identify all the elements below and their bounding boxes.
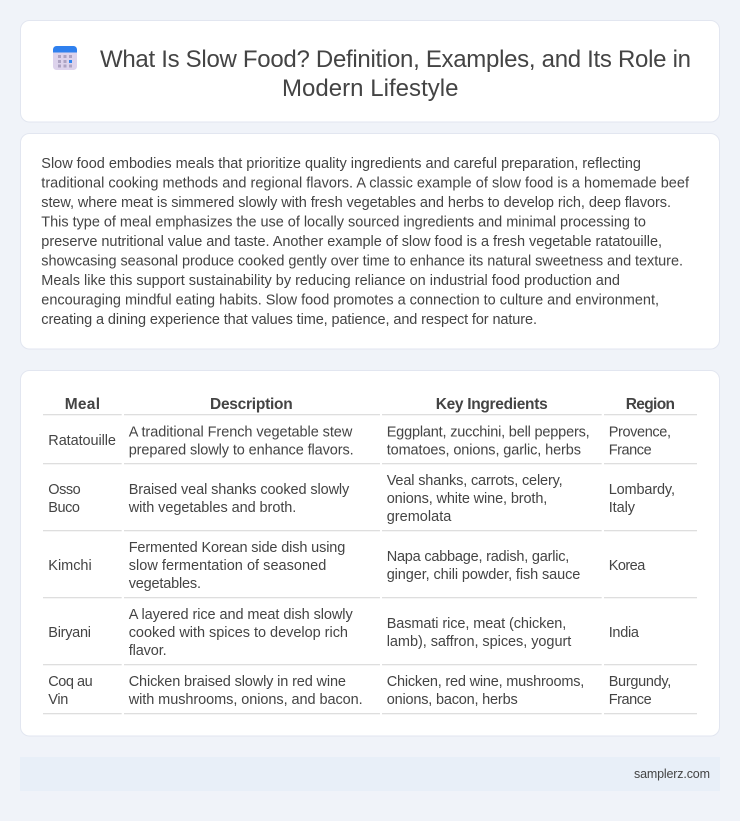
table row: Kimchi: slow fermentation of seasoned [129, 558, 326, 574]
table row: Kimchi: Napa cabbage, radish, garlic, [387, 549, 569, 565]
table row: Kimchi: Kimchi [48, 558, 92, 574]
table row: Coq au Vin: Coq au [48, 674, 93, 690]
table row: Osso Buco: Braised veal shanks cooked slowly [129, 482, 350, 498]
table row: Osso Buco: with vegetables and broth. [128, 500, 296, 516]
table row: Coq au Vin: onions, bacon, herbs [387, 692, 518, 708]
table row: Osso Buco: Veal shanks, carrots, celery, [387, 473, 563, 489]
table row: Biryani: India [609, 625, 640, 641]
table row: Coq au Vin: with mushrooms, onions, and bacon. [128, 692, 363, 708]
table row: Biryani: Basmati rice, meat (chicken, [387, 616, 566, 632]
footer bar: samplerz.com [634, 767, 710, 781]
table row: Osso Buco: onions, white wine, broth, [387, 491, 547, 507]
text block: slow food definition: traditional cooking methods and regional flavors. A classic example of slow food is a homemade beef [41, 176, 690, 192]
table row: Ratatouille: tomatoes, onions, garlic, herbs [387, 442, 581, 458]
table header row: Region [626, 396, 675, 413]
table header row: Description [210, 396, 293, 413]
panel: introduction paragraph [20, 134, 720, 349]
table row: Coq au Vin [48, 674, 671, 708]
table header row: Meal [65, 396, 100, 413]
table row: Kimchi: ginger, chili powder, fish sauce [387, 567, 580, 583]
table row: Kimchi: vegetables. [129, 576, 201, 592]
table header row [65, 396, 675, 413]
table row: Ratatouille: Ratatouille [48, 433, 116, 449]
table row: Ratatouille: Provence, [609, 424, 671, 440]
table row: Osso Buco: Osso [48, 482, 81, 498]
table row: Biryani: Biryani [48, 625, 91, 641]
table row: Osso Buco: Lombardy, [609, 482, 675, 498]
table row: Kimchi [48, 540, 646, 592]
text block: slow food definition: Slow food embodies meals that prioritize quality ingredients and careful preparation, reflecting [41, 156, 641, 172]
table row: Ratatouille: France [609, 442, 652, 458]
table row: Osso Buco: Buco [48, 500, 80, 516]
table row: Osso Buco: Italy [609, 500, 636, 516]
table row: Biryani: cooked with spices to develop rich [129, 625, 348, 641]
table row: Kimchi: Korea [609, 558, 646, 574]
panel: header [20, 20, 720, 122]
table row: Ratatouille: prepared slowly to enhance flavors. [129, 442, 354, 458]
table row: Coq au Vin: Chicken braised slowly in red wine [129, 674, 346, 690]
text block: slow food definition: showcasing seasonal produce cooked gently over time to enhance its natural sweetness and texture. [41, 254, 683, 270]
table row: Coq au Vin: Chicken, red wine, mushrooms, [387, 674, 584, 690]
table row: Biryani: lamb), saffron, spices, yogurt [387, 634, 571, 650]
footer bar [20, 757, 720, 791]
title: Modern Lifestyle [282, 75, 458, 102]
table row: Coq au Vin: France [609, 692, 652, 708]
table header row: Key Ingredients [436, 396, 548, 413]
icon: calendar [53, 46, 77, 70]
text block: slow food definition [41, 156, 690, 328]
table row: Osso Buco: gremolata [387, 509, 452, 525]
title: What Is Slow Food? Definition, Examples, and Its Role in [100, 46, 691, 73]
table row: Ratatouille: A traditional French vegetable stew [129, 424, 353, 440]
table row: Coq au Vin: Burgundy, [609, 674, 671, 690]
table row: Biryani [48, 607, 640, 659]
panel: meals table [20, 370, 720, 736]
table row: Kimchi: Fermented Korean side dish using [129, 540, 345, 556]
table row: Biryani: A layered rice and meat dish slowly [129, 607, 353, 623]
title [100, 46, 691, 102]
text block: slow food definition: stew, where meat is simmered slowly with fresh vegetables and herbs to develop rich, deep flavors. [41, 195, 671, 211]
table row: Coq au Vin: Vin [48, 692, 68, 708]
text block: slow food definition: This type of meal emphasizes the use of locally sourced ingredients and minimal processing to [41, 214, 646, 230]
text block: slow food definition: creating a dining experience that values time, patience, and respect for nature. [41, 312, 537, 328]
text block: slow food definition: preserve nutritional value and taste. Another example of slow food is a fresh vegetable ratatouille, [41, 234, 662, 250]
text block: slow food definition: encouraging mindful eating habits. Slow food promotes a connection to culture and environment, [41, 292, 659, 308]
text block: slow food definition: Meals like this support sustainability by reducing reliance on industrial food production and [41, 273, 620, 289]
table row: Osso Buco [48, 473, 675, 525]
table row: Ratatouille: Eggplant, zucchini, bell peppers, [387, 424, 590, 440]
table row: Biryani: flavor. [129, 643, 167, 659]
table row: Ratatouille [48, 424, 671, 458]
